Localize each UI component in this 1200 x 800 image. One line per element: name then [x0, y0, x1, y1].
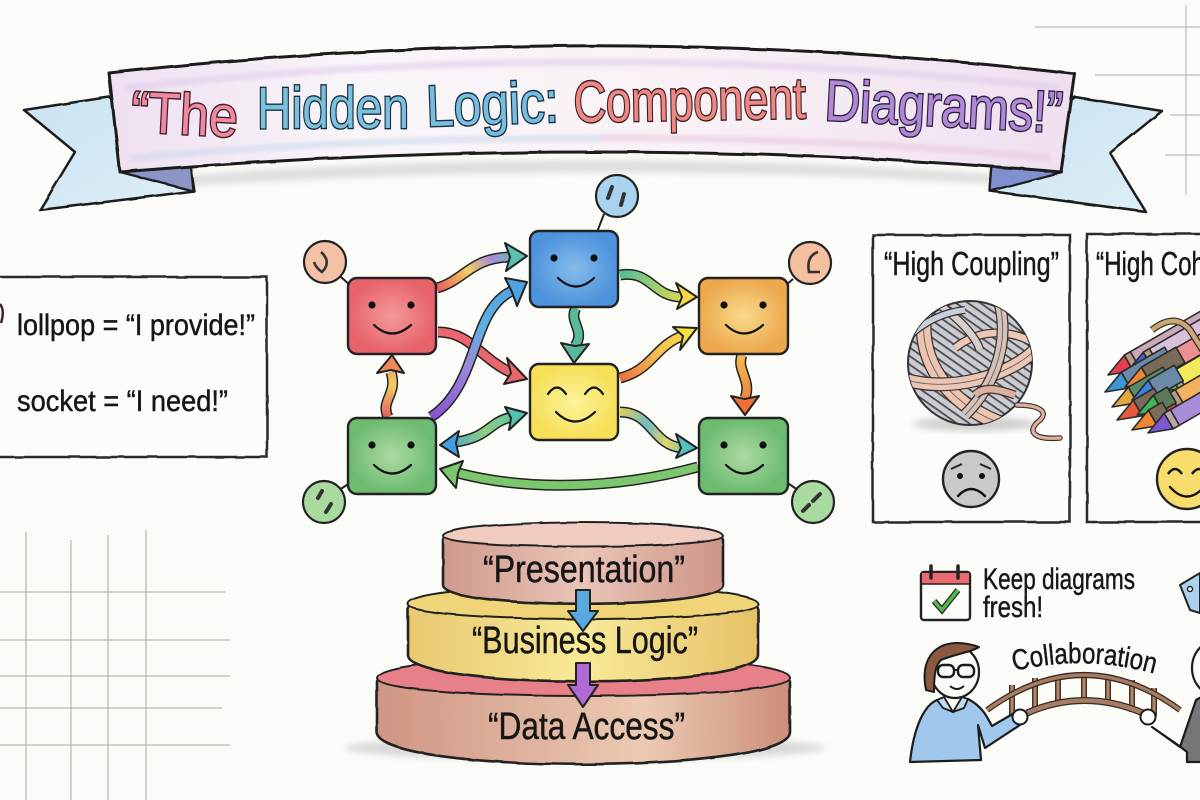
arrow: green to green — [440, 461, 698, 488]
arrow: business logic to data access — [568, 663, 598, 707]
icon: price tag — [1180, 573, 1200, 613]
freshness text: Keep diagrams — [983, 563, 1135, 596]
icon: green socket right — [792, 481, 834, 523]
component: green left — [348, 418, 436, 494]
icon: green socket left — [303, 481, 345, 523]
title text: Logic: — [425, 70, 559, 139]
arrow: yellow to orange — [620, 327, 697, 378]
coupling frame — [873, 235, 1070, 522]
arrow: green and yellow two-way — [440, 407, 527, 457]
banner pencil streaks — [125, 62, 1060, 158]
ground shadow — [345, 736, 825, 760]
collaboration label: Collaboration — [1012, 642, 1156, 674]
arrow: green to red — [377, 355, 404, 417]
right ribbon tail — [990, 97, 1162, 212]
icon: orange lollipop — [789, 242, 831, 284]
icon: lollipop sliver — [0, 304, 3, 323]
panel: high coupling — [873, 235, 1070, 522]
title text: Diagrams!” — [823, 68, 1065, 145]
title text: Hidden — [257, 76, 409, 141]
arrow: red to yellow — [438, 332, 527, 384]
component: orange — [699, 278, 788, 354]
panel: high cohesion — [1087, 234, 1200, 522]
component: yellow — [530, 364, 618, 440]
crayon band — [1152, 321, 1200, 365]
arrow: red to blue — [437, 243, 527, 288]
callout: keep diagrams fresh — [921, 563, 1143, 624]
sketch grid: bottom left — [0, 530, 230, 800]
crayon: third row — [1108, 367, 1172, 415]
legend box — [0, 277, 267, 457]
arrow: blue to yellow — [561, 308, 589, 363]
title text: “The — [129, 79, 240, 150]
arrow: presentation to business logic — [568, 590, 598, 631]
icon: bundle of crayons — [1100, 292, 1200, 441]
crayon: back row — [1104, 295, 1200, 383]
presentation label: “Presentation” — [483, 549, 685, 591]
icon: sad face — [943, 451, 999, 507]
component diagram — [303, 175, 834, 523]
person: right developer — [1140, 638, 1200, 762]
sketch grid: top right — [1035, 5, 1200, 195]
component: green right — [699, 418, 788, 494]
legend shadow — [0, 460, 266, 462]
component: blue — [530, 231, 618, 307]
data access label: “Data Access” — [488, 706, 685, 748]
icon: tangled yarn ball — [900, 301, 1060, 438]
person: left developer — [910, 643, 1028, 762]
bridge — [987, 674, 1180, 716]
lollipop connectors — [339, 214, 798, 490]
component: red — [348, 278, 436, 354]
left ribbon tail — [24, 97, 194, 210]
socket text: socket = “I need!” — [17, 385, 228, 418]
title text — [129, 66, 1065, 150]
icon: blue lollipop — [596, 175, 638, 217]
icon: red lollipop — [304, 241, 346, 283]
icon: calendar with check — [921, 566, 970, 620]
coupling heading: “High Coupling” — [884, 245, 1059, 282]
layered cake stack — [345, 522, 825, 764]
icon: happy face — [1157, 449, 1200, 509]
arrow: green to blue — [431, 278, 527, 417]
lollipop text: lollpop = “I provide!” — [17, 309, 255, 342]
crayon: front row — [1112, 388, 1163, 428]
cohesion frame — [1087, 234, 1200, 522]
banner shadow — [125, 160, 1065, 190]
arrow: yellow to green — [620, 412, 697, 458]
arrow: blue to orange — [620, 274, 697, 309]
banner body — [109, 46, 1075, 172]
arrow: orange to green — [731, 355, 759, 415]
middle layer: business logic — [408, 586, 758, 681]
title text: Component — [573, 66, 806, 135]
freshness text: fresh! — [983, 591, 1043, 624]
bottom layer: data access — [377, 657, 790, 764]
top layer: presentation — [443, 522, 723, 604]
crayon: second row — [1100, 347, 1174, 400]
panel: lollipop and socket legend — [0, 277, 267, 461]
title banner — [24, 46, 1162, 212]
collaboration illustration — [908, 642, 1200, 764]
business logic label: “Business Logic” — [472, 620, 698, 662]
